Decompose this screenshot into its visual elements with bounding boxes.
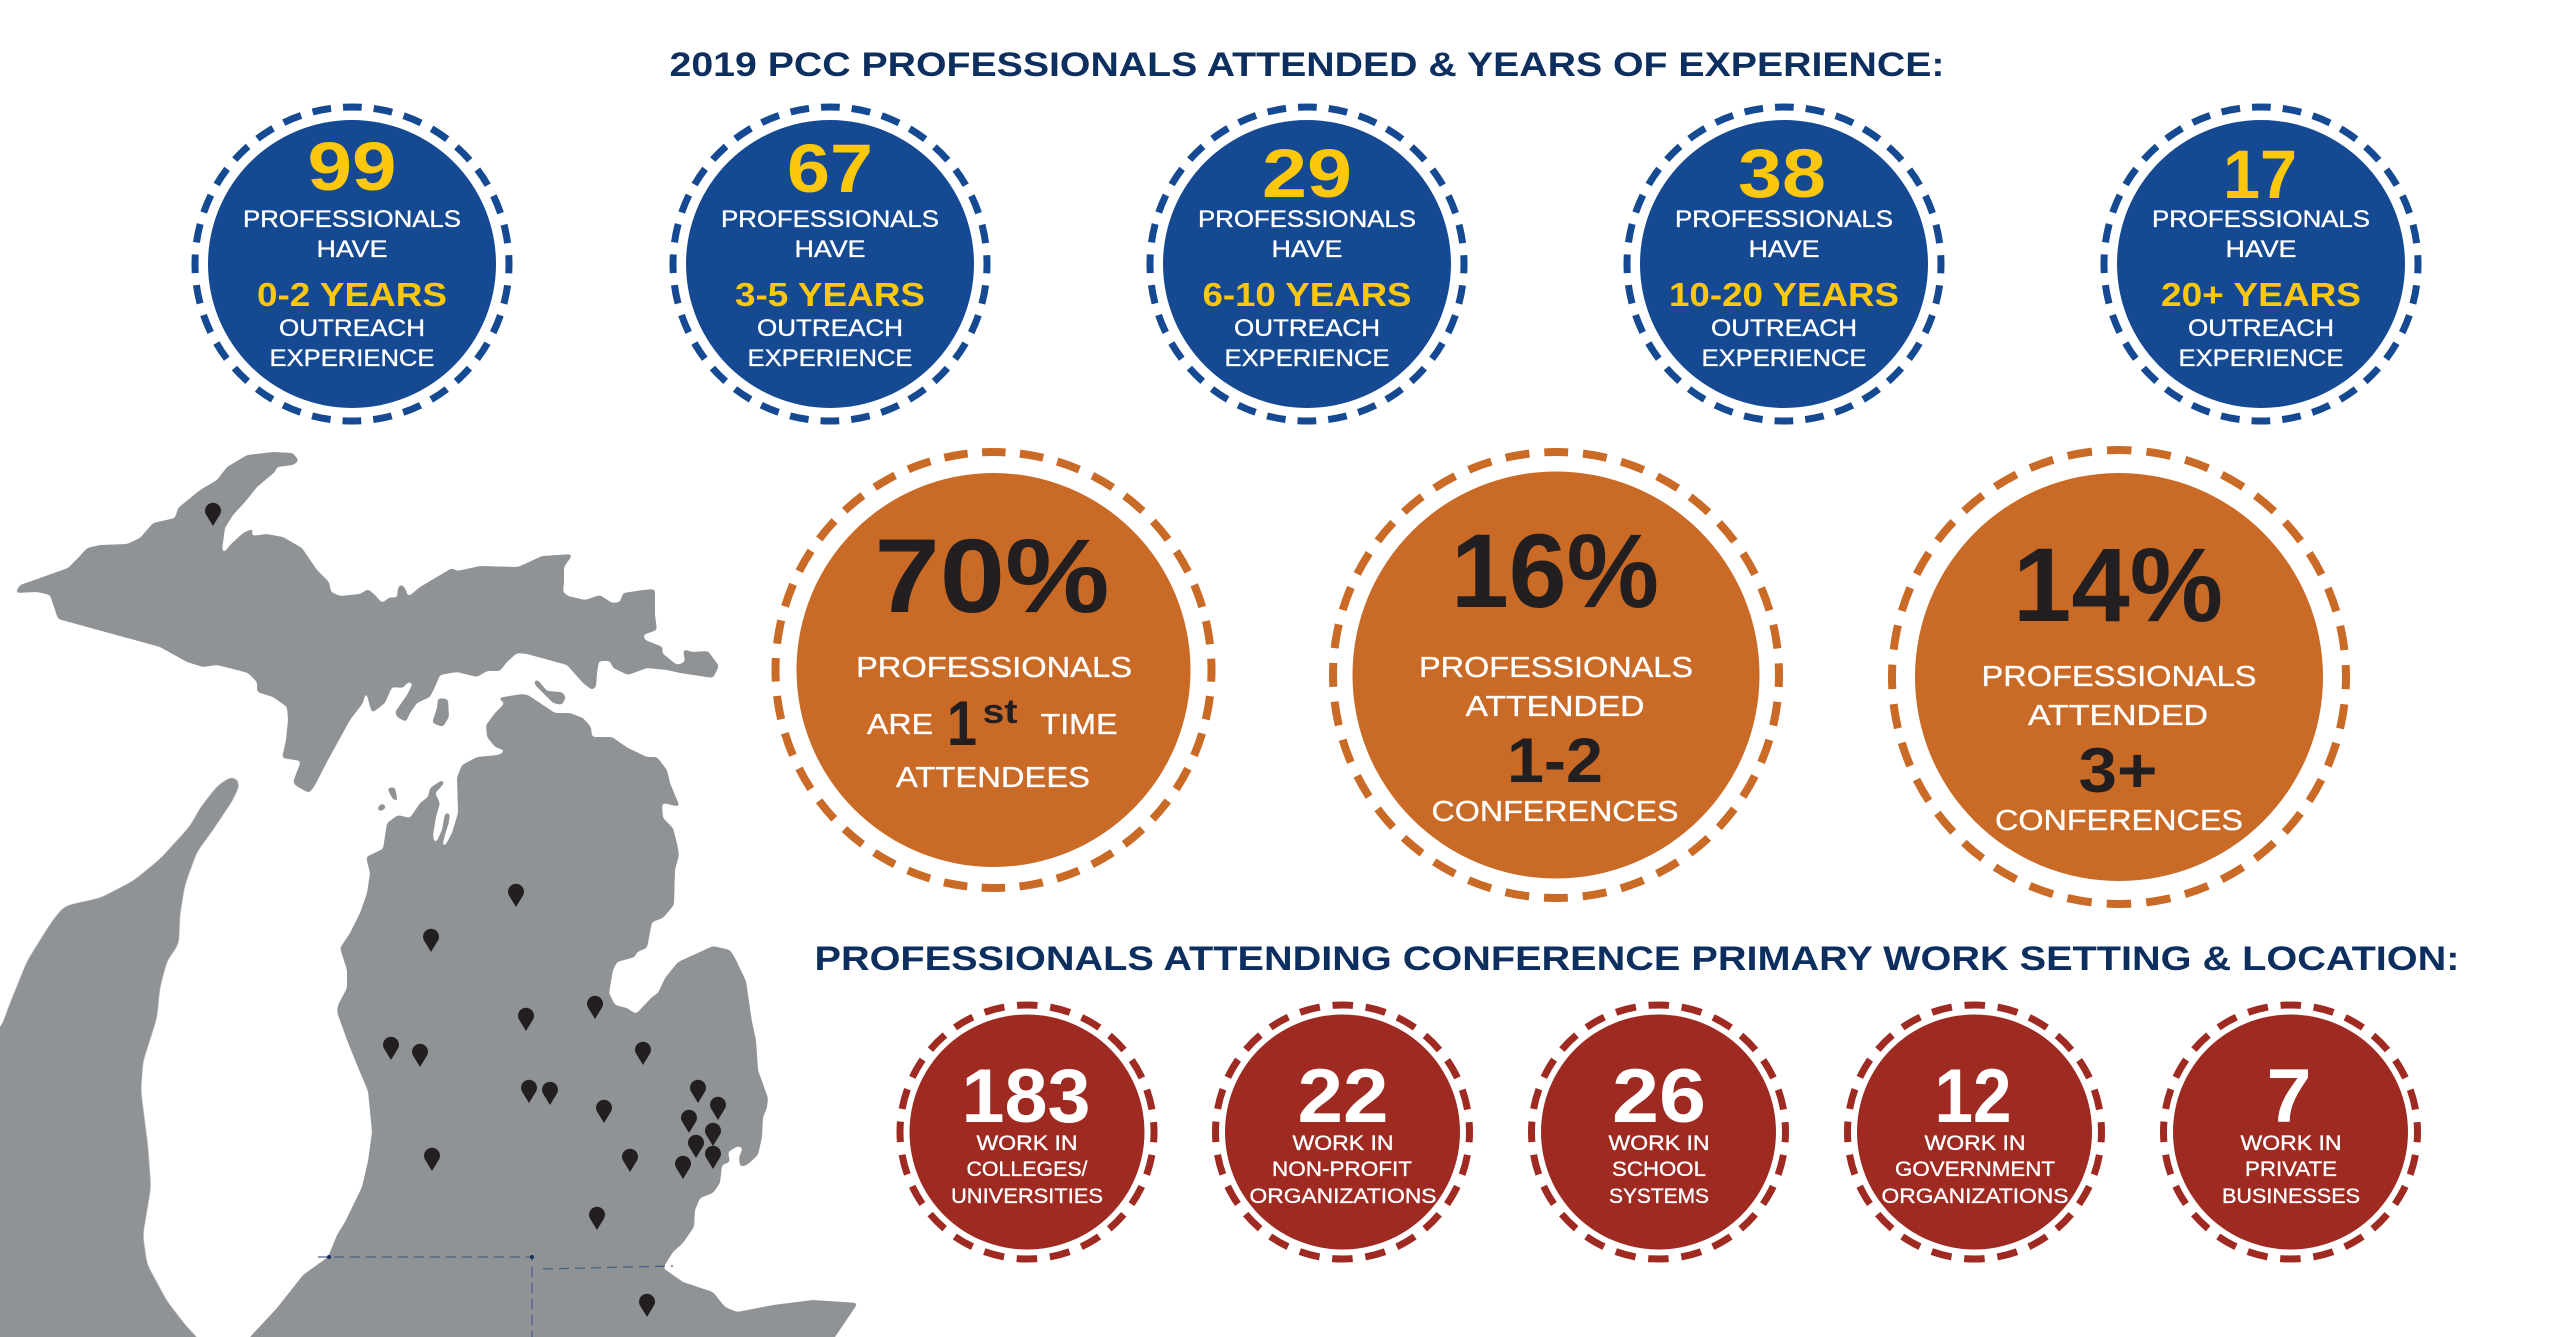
- panel: 16% attended 1-2 conferences badge: 1-2: [1507, 726, 1603, 796]
- panel: 3-5 years badge: 3-5 YEARS: [735, 276, 925, 313]
- panel: school systems badge: WORK IN: [1608, 1132, 1710, 1155]
- panel: 14% attended 3+ conferences badge: ATTENDED: [2028, 700, 2208, 732]
- panel: colleges and universities badge: 183: [962, 1054, 1090, 1139]
- Wisconsin land mass: [0, 775, 241, 1337]
- panel: 70% first-time attendees badge: [776, 452, 1212, 888]
- panel: 20+ years badge: 17: [2223, 136, 2297, 213]
- lower peninsula: [235, 694, 858, 1337]
- panel: 3-5 years badge: [673, 107, 987, 421]
- panel: non-profit organizations badge: NON-PROFIT: [1272, 1158, 1412, 1181]
- panel: school systems badge: SCHOOL: [1612, 1158, 1706, 1181]
- panel: non-profit organizations badge: [1216, 1005, 1470, 1259]
- panel: 0-2 years badge: PROFESSIONALS: [243, 206, 461, 233]
- panel: 20+ years badge: OUTREACH: [2188, 315, 2334, 342]
- heading: work setting and location: PROFESSIONALS ATTENDING CONFERENCE PRIMARY WORK SETTING & LOCATION:: [814, 940, 2460, 978]
- panel: 3-5 years badge: EXPERIENCE: [748, 345, 912, 372]
- panel: 20+ years badge: [2104, 107, 2418, 421]
- panel: 10-20 years badge: HAVE: [1748, 236, 1820, 263]
- map: Michigan with attendee location pins: [0, 452, 858, 1337]
- panel: 10-20 years badge: PROFESSIONALS: [1675, 206, 1893, 233]
- panel: 16% attended 1-2 conferences badge: PROFESSIONALS: [1419, 652, 1693, 684]
- panel: 14% attended 3+ conferences badge: PROFESSIONALS: [1982, 661, 2256, 693]
- panel: 20+ years badge: 20+ YEARS: [2161, 276, 2361, 313]
- panel: 0-2 years badge: HAVE: [316, 236, 388, 263]
- panel: 3-5 years badge: PROFESSIONALS: [721, 206, 939, 233]
- panel: 0-2 years badge: [195, 107, 509, 421]
- islands: [377, 680, 566, 812]
- panel: school systems badge: SYSTEMS: [1609, 1185, 1709, 1208]
- panel: 6-10 years badge: 6-10 YEARS: [1202, 276, 1412, 313]
- panel: 6-10 years badge: [1150, 107, 1464, 421]
- panel: 70% first-time attendees badge: ATTENDEES: [896, 762, 1090, 794]
- panel: 70% first-time attendees badge: 1: [947, 689, 977, 759]
- panel: private businesses badge: BUSINESSES: [2222, 1185, 2360, 1208]
- panel: school systems badge: [1532, 1005, 1786, 1259]
- panel: 3-5 years badge: 67: [787, 130, 873, 207]
- panel: 20+ years badge: HAVE: [2226, 236, 2296, 263]
- panel: 10-20 years badge: [1627, 107, 1941, 421]
- panel: school systems badge: 26: [1612, 1054, 1706, 1139]
- panel: 6-10 years badge: OUTREACH: [1234, 315, 1380, 342]
- panel: colleges and universities badge: UNIVERSITIES: [951, 1185, 1103, 1208]
- panel: 70% first-time attendees badge: st: [982, 693, 1018, 731]
- panel: 14% attended 3+ conferences badge: 14%: [2013, 527, 2223, 644]
- panel: government organizations badge: GOVERNMENT: [1895, 1158, 2055, 1181]
- panel: government organizations badge: [1848, 1005, 2102, 1259]
- title: attendance and experience: 2019 PCC PROFESSIONALS ATTENDED & YEARS OF EXPERIENCE:: [670, 46, 1944, 84]
- panel: 70% first-time attendees badge: ARE: [867, 709, 933, 741]
- panel: 14% attended 3+ conferences badge: CONFERENCES: [1995, 805, 2243, 837]
- panel: 70% first-time attendees badge: TIME: [1040, 709, 1118, 741]
- panel: 70% first-time attendees badge: 70%: [874, 518, 1110, 635]
- panel: 16% attended 1-2 conferences badge: ATTENDED: [1466, 691, 1644, 723]
- location pins: [205, 503, 726, 1317]
- panel: non-profit organizations badge: 22: [1298, 1054, 1388, 1139]
- panel: government organizations badge: ORGANIZATIONS: [1882, 1185, 2068, 1208]
- panel: private businesses badge: [2164, 1005, 2418, 1259]
- panel: 6-10 years badge: PROFESSIONALS: [1198, 206, 1416, 233]
- panel: government organizations badge: WORK IN: [1924, 1132, 2026, 1155]
- panel: colleges and universities badge: WORK IN: [976, 1132, 1078, 1155]
- panel: 6-10 years badge: EXPERIENCE: [1224, 345, 1390, 372]
- panel: private businesses badge: 7: [2266, 1054, 2312, 1139]
- panel: private businesses badge: WORK IN: [2240, 1132, 2342, 1155]
- panel: 14% attended 3+ conferences badge: [1892, 450, 2346, 904]
- panel: 20+ years badge: PROFESSIONALS: [2152, 206, 2370, 233]
- panel: non-profit organizations badge: ORGANIZATIONS: [1250, 1185, 1436, 1208]
- panel: 10-20 years badge: OUTREACH: [1711, 315, 1857, 342]
- panel: 3-5 years badge: OUTREACH: [757, 315, 903, 342]
- panel: 6-10 years badge: HAVE: [1272, 236, 1342, 263]
- panel: non-profit organizations badge: WORK IN: [1292, 1132, 1394, 1155]
- panel: 16% attended 1-2 conferences badge: [1333, 452, 1779, 898]
- panel: government organizations badge: 12: [1934, 1054, 2012, 1139]
- panel: 20+ years badge: EXPERIENCE: [2178, 345, 2344, 372]
- panel: 14% attended 3+ conferences badge: 3+: [2078, 736, 2158, 806]
- panel: 3-5 years badge: HAVE: [794, 236, 866, 263]
- panel: private businesses badge: PRIVATE: [2245, 1158, 2337, 1181]
- panel: 6-10 years badge: 29: [1262, 135, 1352, 212]
- panel: 16% attended 1-2 conferences badge: 16%: [1451, 513, 1659, 630]
- panel: 16% attended 1-2 conferences badge: CONFERENCES: [1432, 796, 1678, 828]
- panel: 10-20 years badge: 38: [1738, 135, 1826, 212]
- panel: 0-2 years badge: 99: [308, 128, 396, 205]
- panel: 0-2 years badge: OUTREACH: [279, 315, 425, 342]
- panel: colleges and universities badge: COLLEGES/: [966, 1158, 1088, 1181]
- state border dashes: [318, 1255, 673, 1337]
- panel: 10-20 years badge: 10-20 YEARS: [1669, 276, 1899, 313]
- panel: colleges and universities badge: [900, 1005, 1154, 1259]
- panel: 10-20 years badge: EXPERIENCE: [1702, 345, 1866, 372]
- panel: 0-2 years badge: 0-2 YEARS: [257, 276, 447, 313]
- panel: 0-2 years badge: EXPERIENCE: [270, 345, 434, 372]
- panel: 70% first-time attendees badge: PROFESSIONALS: [856, 652, 1132, 684]
- upper peninsula: [15, 452, 719, 793]
